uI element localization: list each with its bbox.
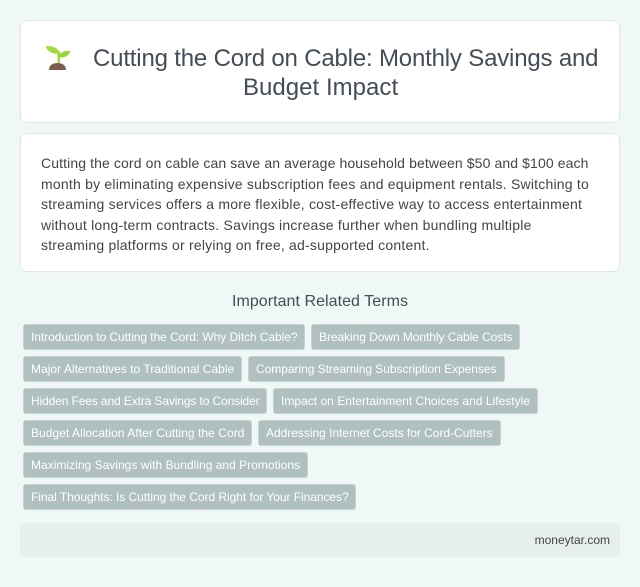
tag bbox=[258, 420, 501, 446]
summary text: without long-term contracts. Savings increase further when bundling multiple bbox=[41, 217, 532, 233]
header panel bbox=[20, 20, 620, 123]
tag bbox=[311, 324, 520, 350]
tag bbox=[23, 324, 305, 350]
tag bbox=[273, 388, 538, 414]
tag: Addressing Internet Costs for Cord-Cutters bbox=[266, 426, 493, 440]
tag bbox=[23, 388, 267, 414]
tag bbox=[23, 356, 242, 382]
tag bbox=[23, 484, 356, 510]
icon: seedling bbox=[46, 46, 70, 70]
summary text: streaming platforms or relying on free, ad-supported content. bbox=[41, 237, 430, 253]
tag: Introduction to Cutting the Cord: Why Ditch Cable? bbox=[31, 330, 297, 344]
tag: Comparing Streaming Subscription Expenses bbox=[256, 362, 496, 376]
summary text: streaming services offers a more flexible, cost-effective way to access entertainment bbox=[41, 196, 582, 212]
tag: Budget Allocation After Cutting the Cord bbox=[31, 426, 244, 440]
tag bbox=[23, 420, 252, 446]
tag: Major Alternatives to Traditional Cable bbox=[31, 362, 234, 376]
title bbox=[93, 45, 598, 101]
tag bbox=[248, 356, 505, 382]
summary text: Cutting the cord on cable can save an average household between $50 and $100 each bbox=[41, 155, 589, 171]
tag: Hidden Fees and Extra Savings to Consider bbox=[31, 394, 260, 408]
tag: Impact on Entertainment Choices and Lifestyle bbox=[281, 394, 530, 408]
tag: Maximizing Savings with Bundling and Promotions bbox=[31, 458, 300, 472]
footer source: moneytar.com bbox=[535, 533, 610, 547]
tag: Breaking Down Monthly Cable Costs bbox=[319, 330, 512, 344]
summary text: month by eliminating expensive subscription fees and equipment rentals. Switching to bbox=[41, 176, 589, 192]
tag bbox=[23, 452, 308, 478]
tag: Final Thoughts: Is Cutting the Cord Right for Your Finances? bbox=[31, 490, 349, 504]
summary text bbox=[41, 155, 589, 253]
title: Cutting the Cord on Cable: Monthly Savings and bbox=[93, 45, 598, 72]
summary panel bbox=[20, 133, 620, 272]
footer bar bbox=[20, 523, 620, 557]
section heading: Important Related Terms bbox=[232, 293, 408, 310]
related terms tags bbox=[23, 324, 538, 510]
title: Budget Impact bbox=[243, 74, 398, 101]
